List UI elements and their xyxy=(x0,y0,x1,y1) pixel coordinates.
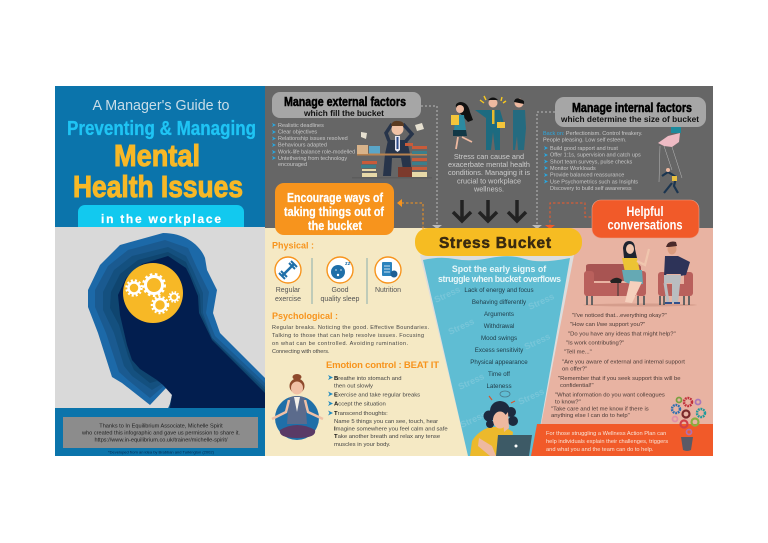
heading: early signs xyxy=(438,264,561,284)
callout: encourage ways: Encourage ways of xyxy=(287,190,384,205)
illustration: stressed woman at laptop xyxy=(470,391,532,456)
panel: early signs bucket: Stress xyxy=(447,316,476,337)
list: early signs: Physical appearance xyxy=(470,359,528,366)
heading: emotion control: Emotion control : BEAT IT xyxy=(326,360,439,371)
connector: orange dashed to bucket xyxy=(545,203,591,229)
panel: dark grey top band xyxy=(265,86,713,229)
list: early signs: Lateness xyxy=(486,383,512,390)
list: early signs: Excess sensitivity xyxy=(475,347,524,354)
cover title: A Manager's Guide to xyxy=(92,98,230,114)
panel: early signs bucket: Stress xyxy=(517,386,546,407)
cover title: Mental xyxy=(114,138,200,173)
callout: helpful conversations: Helpful xyxy=(626,203,664,219)
list: external factors xyxy=(272,123,355,168)
callout: wellness action plan xyxy=(531,424,713,456)
panel: cream xyxy=(265,228,476,456)
list: internal factors xyxy=(543,131,643,192)
list: BEAT IT xyxy=(328,375,448,448)
panel: early signs bucket xyxy=(420,255,574,456)
text block: stress can cause: crucial to workplace xyxy=(457,176,521,186)
list: early signs: Mood swings xyxy=(481,335,517,342)
panel: early signs bucket: Stress xyxy=(523,331,552,352)
icon labels: exercise xyxy=(275,296,301,303)
callout: helpful conversations: conversations xyxy=(608,216,683,232)
text block: psychological: Connecting with others. xyxy=(272,349,330,355)
illustration: overwhelmed businessman xyxy=(352,121,432,178)
list: internal factors: Build good rapport and trust xyxy=(550,146,618,152)
text block: helpful questions: confidential!" xyxy=(560,383,594,389)
text block: psychological xyxy=(272,325,429,355)
callout: encourage ways: the bucket xyxy=(308,218,363,233)
list: BEAT IT: muscles in your body. xyxy=(334,442,391,448)
text block: helpful questions: "I've noticed that...everything okay?" xyxy=(572,313,667,319)
callout: wellness action plan: and what you and the team can do to help. xyxy=(546,447,654,453)
illustration: stressed colleagues xyxy=(451,96,526,150)
list: BEAT IT: Name 5 things you can see, touch, hear xyxy=(334,419,438,425)
text block: psychological: Talking to those that can help resolve issues. Focusing xyxy=(272,333,424,339)
text block: psychological: on what can be controlled. Avoiding rumination. xyxy=(272,341,408,347)
list: external factors: Behaviours adapted xyxy=(278,143,327,149)
heading: manage external factors xyxy=(272,92,421,118)
list: external factors: Realistic deadlines xyxy=(278,123,324,129)
cover footer: *Developed from an idea by Brabban and Turkington (2002) xyxy=(108,450,215,454)
text block: helpful questions: "Take care and let me know if there is xyxy=(551,406,649,412)
subtitle pill xyxy=(78,205,244,227)
icon labels: Regular xyxy=(276,287,301,294)
text block: stress can cause: Stress can cause and xyxy=(454,152,524,161)
list: BEAT IT: Take another breath and relax any tense xyxy=(334,434,441,440)
list: early signs: Withdrawal xyxy=(484,323,514,330)
list: early signs: Lack of energy and focus xyxy=(464,287,534,294)
list: internal factors: Short team surveys, pulse checks xyxy=(550,159,632,165)
callout: wellness action plan: help individuals explain their challenges, triggers xyxy=(546,439,668,445)
cover footer: who created this infographic and gave us permission to share it. xyxy=(81,430,240,436)
cover title: Preventing & Managing xyxy=(67,118,256,140)
list: early signs: Time off xyxy=(488,371,510,378)
illustration: puppet on strings xyxy=(658,127,682,193)
cover title xyxy=(67,98,256,204)
list: external factors: Relationship issues resolved xyxy=(278,136,348,142)
text block: helpful questions: "How can I/we support you?" xyxy=(570,322,645,328)
icon: three down arrows xyxy=(453,200,526,221)
icon: nutrition xyxy=(375,257,401,283)
illustration: meditating woman xyxy=(272,374,323,440)
list: external factors: Untethering from technology xyxy=(278,156,347,162)
heading: manage external factors: which fill the bucket xyxy=(303,108,384,118)
text block: helpful questions: to know?" xyxy=(555,400,581,406)
connector: orange dashed to encourage box xyxy=(397,199,423,229)
heading: manage external factors: Manage external factors xyxy=(284,94,406,109)
connector: internal dotted arrow xyxy=(532,112,555,229)
heading: manage internal factors: which determine the size of bucket xyxy=(560,114,699,124)
icon labels: Good xyxy=(331,287,349,294)
text block: helpful questions: anything else I can do to help" xyxy=(551,413,630,419)
subtitle pill: in the workplace xyxy=(101,212,221,226)
text block: helpful questions xyxy=(551,313,685,419)
panel: pink xyxy=(530,228,713,456)
text block: helpful questions: "Tell me..." xyxy=(564,350,592,356)
cover title: Health Issues xyxy=(73,169,243,204)
list: internal factors: Monitor Workloads xyxy=(550,166,596,172)
list: internal factors: Discovery to build self awareness xyxy=(550,186,632,192)
callout: wellness action plan: For those struggling a Wellness Action Plan can xyxy=(546,431,666,437)
connector: external dotted arrow xyxy=(421,106,442,229)
list: external factors: Clear objectives xyxy=(278,130,317,136)
list: BEAT IT: Exercise and take regular breaks xyxy=(334,392,420,398)
list: internal factors: Offer 1:1s, supervision and catch ups xyxy=(550,153,641,159)
list: external factors: Work-life balance role-modelled xyxy=(278,149,355,155)
icon labels: Nutrition xyxy=(375,287,401,294)
callout: helpful conversations xyxy=(592,200,699,238)
list: internal factors: Use Psychometrics such as Insights xyxy=(550,179,638,185)
text block: stress can cause: conditions. Managing it is xyxy=(448,168,530,177)
list: early signs: Arguments xyxy=(484,311,514,318)
cover footer: Thanks to In Equilibrium Associate, Michelle Spirit xyxy=(99,424,223,430)
list: internal factors: Back on: Perfectionism. Control freakery. xyxy=(543,131,643,137)
heading: manage internal factors: Manage internal factors xyxy=(572,100,692,115)
heading: psychological: Psychological : xyxy=(272,311,338,321)
list: internal factors: People pleasing. Low self esteem. xyxy=(543,138,627,144)
text block: helpful questions: "Remember that if you seek support this will be xyxy=(558,376,681,382)
cover footer: https://www.in-equilibrium.co.uk/trainer/michelle-spirit/ xyxy=(94,438,228,444)
list: BEAT IT: Imagine somewhere you feel calm and safe xyxy=(334,426,448,432)
panel: early signs bucket: Stress xyxy=(433,284,462,305)
text block: helpful questions: on offer?" xyxy=(562,366,587,372)
cover footer xyxy=(55,408,265,456)
heading: physical: Physical : xyxy=(272,240,314,250)
text block: psychological: Regular breaks. Noticing the good. Effective Boundaries. xyxy=(272,325,429,331)
text block: stress can cause xyxy=(448,152,530,194)
icon labels xyxy=(275,287,401,303)
text block: stress can cause: wellness. xyxy=(473,184,504,194)
list: external factors: encouraged xyxy=(278,162,307,168)
callout: encourage ways xyxy=(275,183,394,235)
illustration: two people in armchairs xyxy=(583,241,697,306)
icon: regular exercise xyxy=(275,257,301,283)
list: BEAT IT: Transcend thoughts: xyxy=(334,411,388,417)
list: BEAT IT: Breathe into stomach and xyxy=(334,376,401,382)
list: BEAT IT: then out slowly xyxy=(334,384,373,390)
heading: manage internal factors xyxy=(555,97,706,127)
heading: early signs: Spot the early signs of xyxy=(452,264,546,274)
illustration: lightbulb of gears xyxy=(672,398,705,451)
text block: helpful questions: "Do you have any ideas that might help?" xyxy=(568,332,676,338)
text block: helpful questions: "What information do you want colleagues xyxy=(555,392,665,398)
gear icons xyxy=(126,274,179,313)
heading: early signs: struggle when bucket overflows xyxy=(438,274,561,284)
panel: early signs bucket: Stress xyxy=(459,409,488,430)
text block: helpful questions: "Are you aware of external and internal support xyxy=(562,360,685,366)
panel: early signs bucket: Stress xyxy=(457,371,486,392)
heading: stress bucket: Stress Bucket xyxy=(439,235,551,252)
panel: early signs bucket: Stress xyxy=(527,291,556,312)
icon: good sleep: zz xyxy=(345,261,351,267)
list: BEAT IT: Accept the situation xyxy=(334,402,386,408)
callout: encourage ways: taking things out of xyxy=(284,204,385,219)
heading: stress bucket xyxy=(415,228,582,256)
icon group: physical wellbeing xyxy=(275,257,401,304)
text block: helpful questions: "Is work contributing?" xyxy=(566,340,624,346)
icon labels: quality sleep xyxy=(321,296,360,303)
panel: cover xyxy=(55,86,265,456)
list: early signs: Behaving differently xyxy=(472,299,527,306)
list: internal factors: Provide balanced reassurance xyxy=(550,173,624,179)
text block: stress can cause: exacerbate mental health xyxy=(448,160,530,169)
illustration: head silhouette with gears xyxy=(88,233,265,408)
list: early signs xyxy=(464,287,534,390)
